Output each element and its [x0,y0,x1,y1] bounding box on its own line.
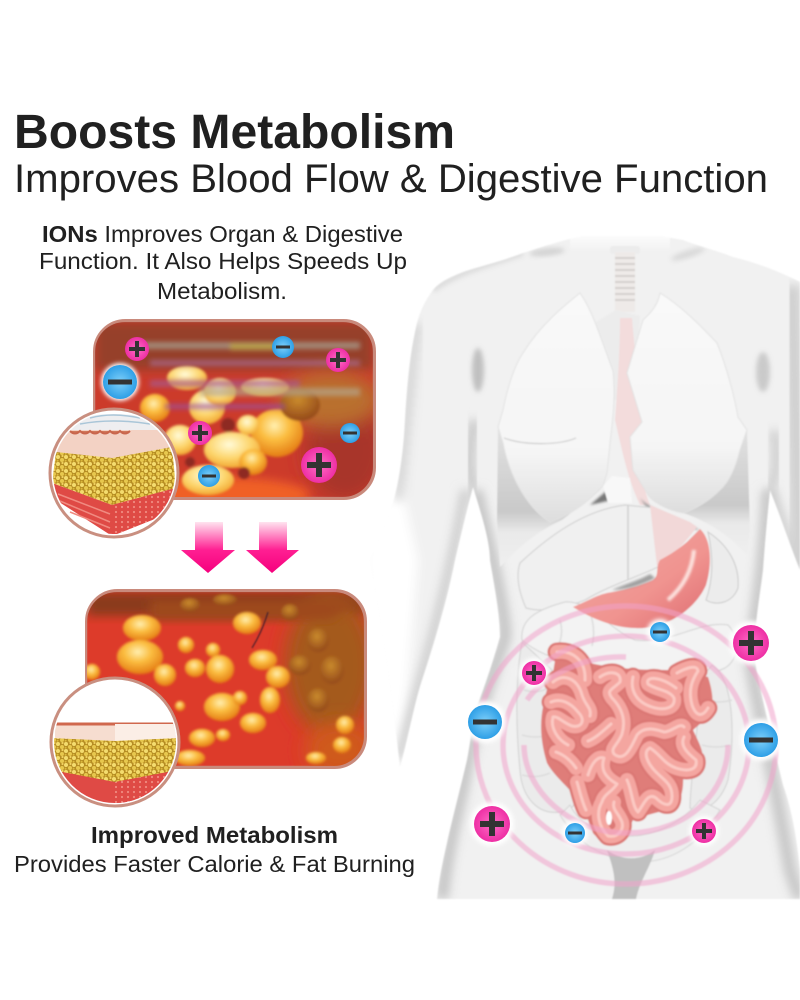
intro text block: IONs Improves Organ & Digestive [42,221,403,247]
organ: colon [517,602,737,899]
organ: right wedge [640,430,750,555]
organ: left wedge [497,428,600,567]
organ: right lung [627,293,747,513]
body silhouette [360,230,800,900]
ion: minus [101,363,139,401]
intro text block [39,221,407,304]
organ: shadow under lungs [640,498,700,530]
organ: trachea [596,246,640,400]
title: Boosts Metabolism [14,106,455,159]
ion: plus [301,447,337,483]
panel: fat before treatment [94,320,385,513]
ion: plus [326,348,350,372]
body ions [464,619,782,846]
inset: reduced fat layer [51,678,179,810]
organ: esophagus [615,318,650,505]
ion: plus [188,421,212,445]
subtitle: Improves Blood Flow & Digestive Function [14,157,768,201]
organ: stomach [573,529,710,628]
caption body: Provides Faster Calorie & Fat Burning [14,851,415,877]
ion: minus [647,619,673,645]
ion: minus [740,719,782,761]
intro text block: Metabolism. [157,278,287,304]
panel: fat after treatment [84,590,375,778]
ion: minus [340,423,360,443]
fade of lower left arm [370,499,416,738]
arrow: left [181,522,235,573]
ion: plus [689,816,719,846]
ion: plus [519,658,549,688]
ion: plus [125,337,149,361]
organ: left lung [498,293,614,522]
small intestine [541,648,712,842]
panel: body with organs [360,230,800,900]
ion: minus [198,465,220,487]
arrow: right [246,522,299,573]
ion: minus [272,336,294,358]
caption heading: Improved Metabolism [91,822,338,848]
organ: heart area [603,476,632,503]
organ: spleen [706,532,738,603]
organ: breast contour [504,438,576,444]
ion: minus [464,701,506,743]
ion: plus [470,802,514,846]
concentric ion rings [476,606,776,884]
ion: plus [729,621,773,665]
ion: minus [562,820,588,846]
organ: upper stomach [650,505,697,566]
organ: liver [518,505,660,610]
inset: thick fat layer [50,409,178,537]
intro text block: Function. It Also Helps Speeds Up [39,248,407,274]
